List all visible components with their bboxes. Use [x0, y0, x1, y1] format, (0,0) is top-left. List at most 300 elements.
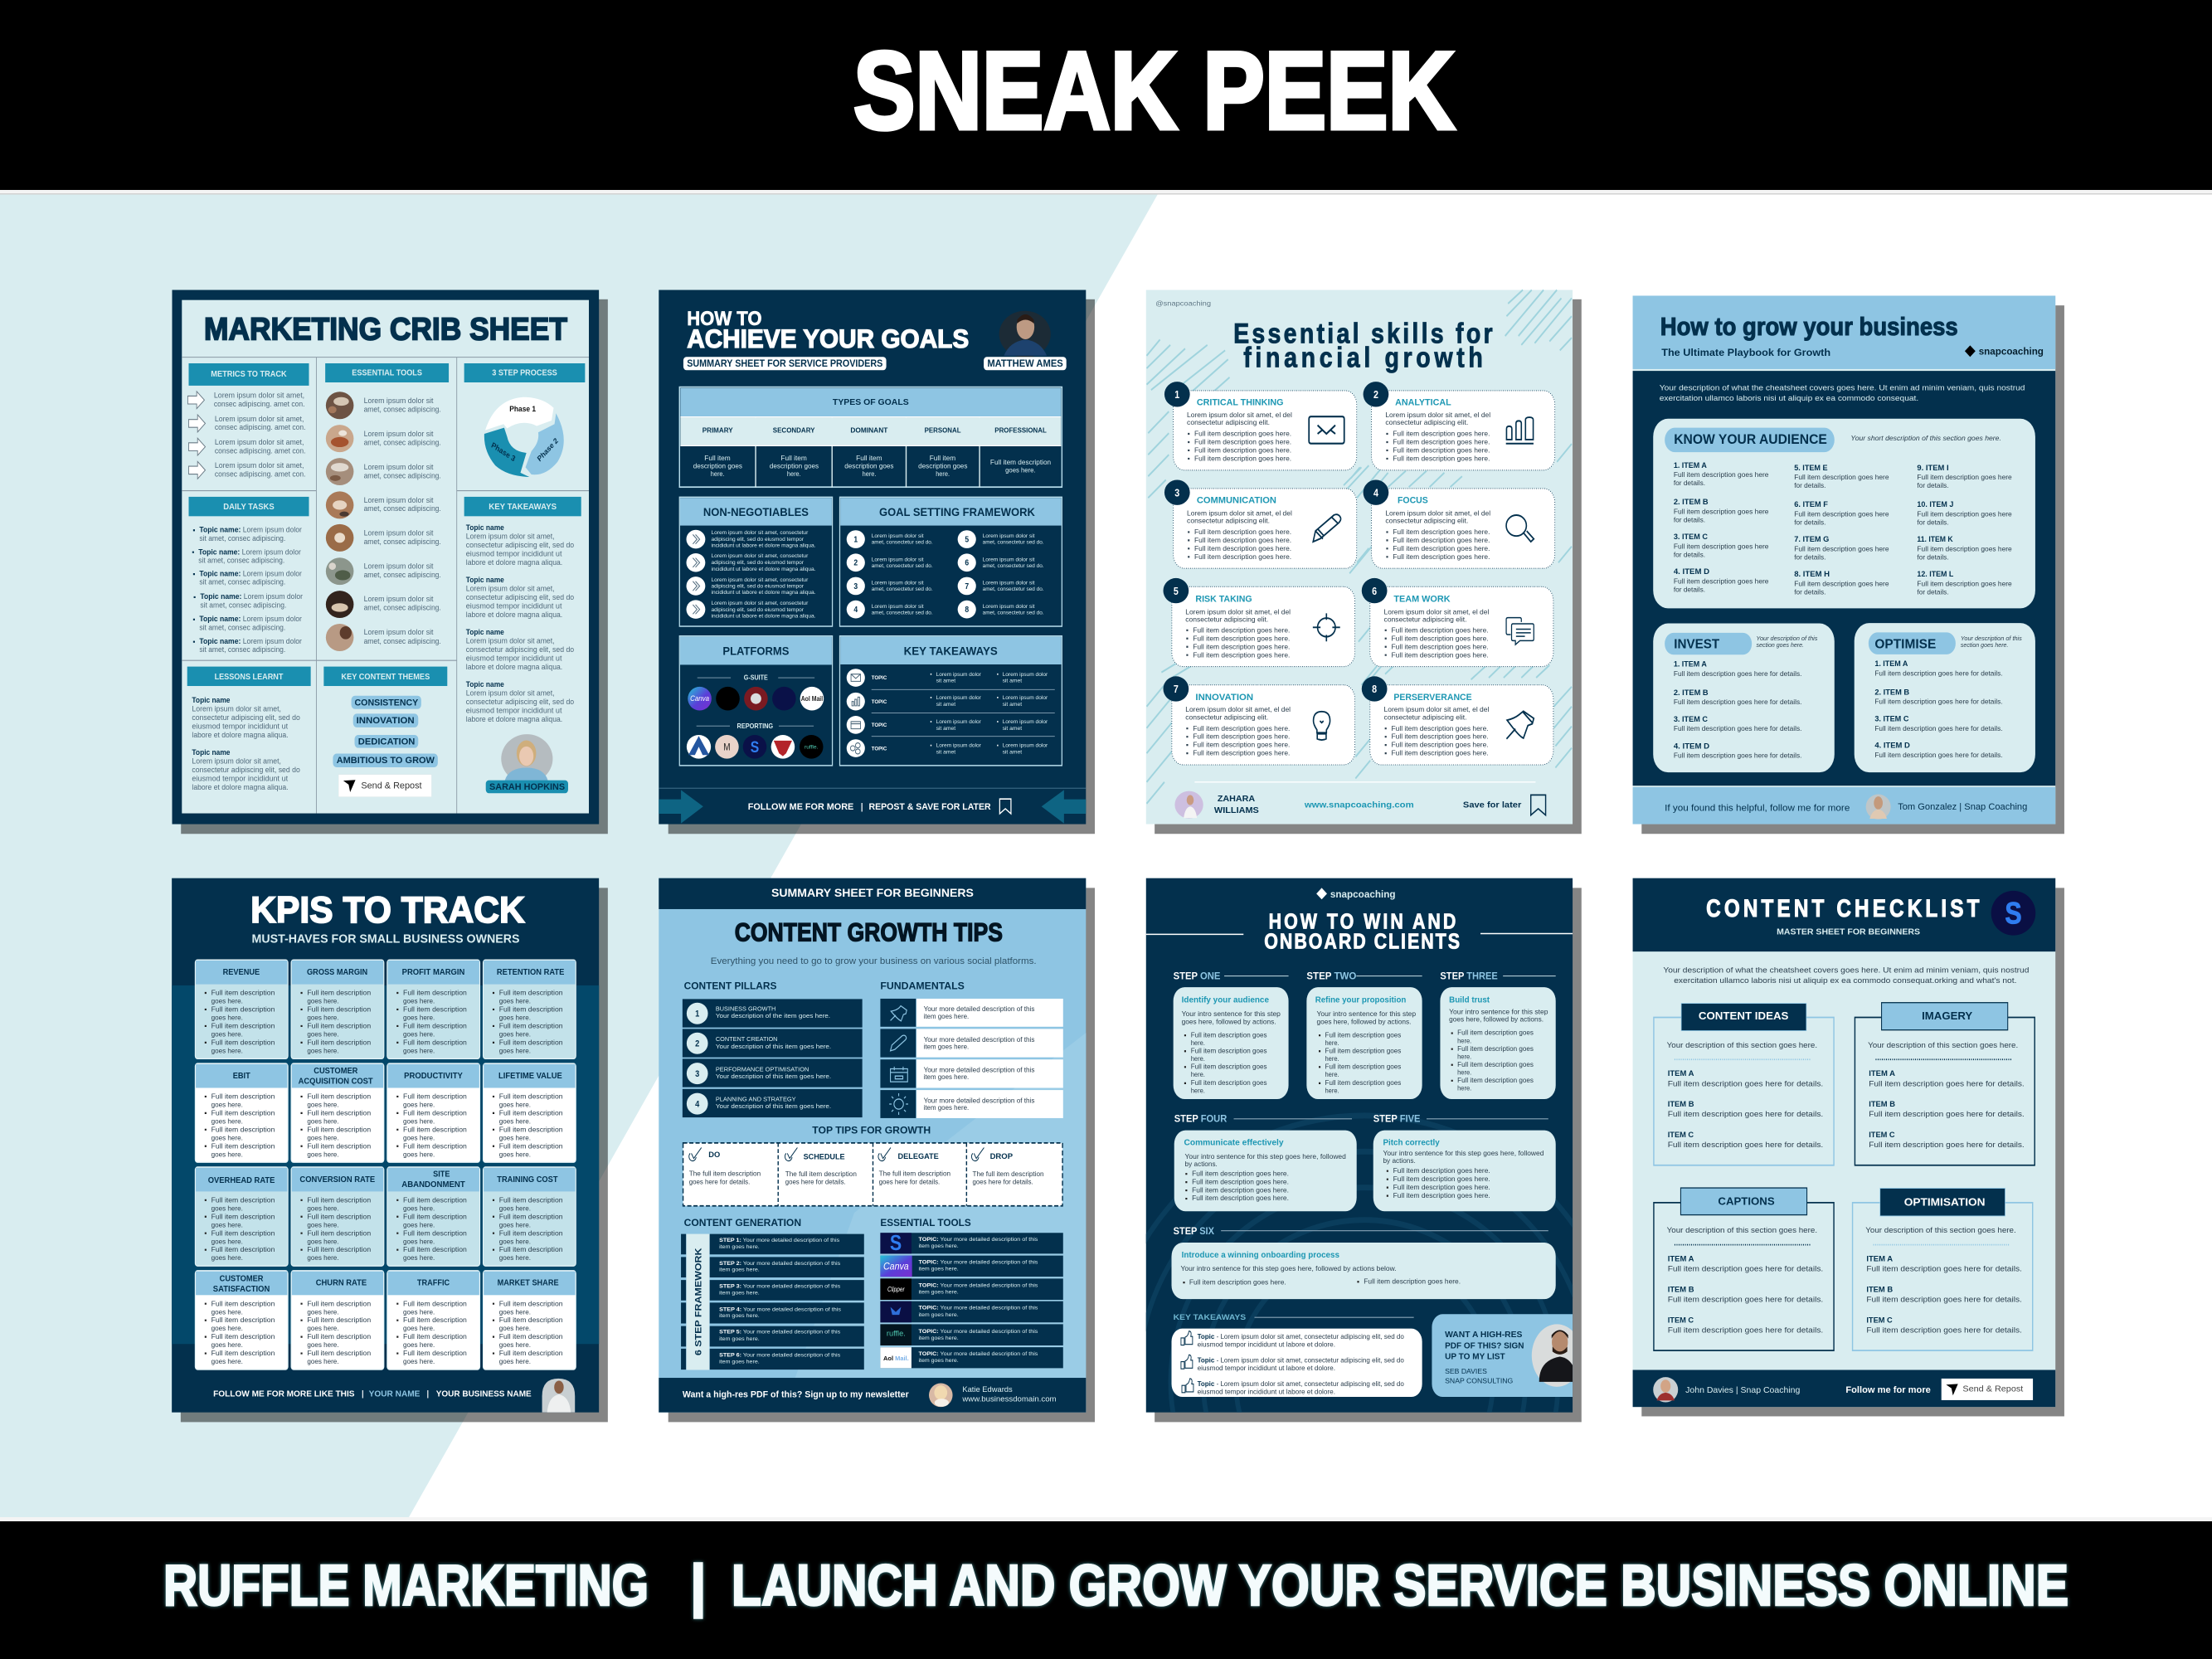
section: content generation: [681, 1218, 864, 1370]
card: gross margin: goes here.: [307, 1014, 339, 1022]
table: types of goals: PERSONAL: [925, 426, 961, 435]
card: step six: [1171, 1226, 1556, 1299]
card: conversion rate: goes here.: [307, 1254, 339, 1262]
footer strip with arrows: |: [861, 802, 863, 812]
section: non-negotiables: Lorem ipsum dolor sit amet, consectetur: [712, 577, 808, 583]
section: daily tasks: sit amet, consec adipiscing.: [199, 623, 285, 632]
footer strip: [213, 1379, 575, 1413]
footer strip: [1174, 782, 1546, 819]
section: key content themes: [323, 667, 447, 797]
card: traffic: Full item description: [403, 1350, 467, 1357]
section: daily tasks: Topic name: Lorem ipsum dolor: [199, 569, 302, 577]
card 5: risk taking: Full item description goes here.: [1193, 651, 1290, 659]
card 8: perseverance: 8: [1372, 683, 1377, 696]
card: revenue: goes here.: [211, 1014, 243, 1022]
table: types of goals: here.: [936, 470, 950, 478]
title: Everything you need to go to grow your business on various social platforms.: [711, 956, 1037, 966]
section: top tips for growth: [683, 1126, 1062, 1206]
card 8: perseverance: Full item description goes here.: [1392, 732, 1489, 741]
card: know your audience: KNOW YOUR AUDIENCE: [1674, 432, 1827, 448]
section: key takeaways: TOPIC: [872, 723, 887, 728]
section: lessons learnt: Lorem ipsum dolor sit amet,: [192, 757, 281, 766]
card: ebit: Full item description: [211, 1142, 275, 1151]
section: key takeaways: Lorem ipsum dolor: [936, 696, 981, 701]
icon: light bulb: [1314, 712, 1330, 740]
table: types of goals: here.: [711, 470, 725, 478]
card: step three: Your intro sentence for this step: [1449, 1008, 1548, 1016]
section: metrics to track: METRICS TO TRACK: [211, 369, 287, 378]
panel: essential skills for financial growth: [1146, 290, 1582, 834]
table: types of goals: description goes: [918, 462, 967, 470]
section: metrics to track: consec adipiscing. amet con.: [215, 423, 306, 431]
card: optimise: OPTIMISE: [1874, 637, 1936, 652]
card: retention rate: goes here.: [499, 1014, 531, 1022]
card: know your audience: Full item description goes here: [1794, 510, 1889, 518]
card: revenue: Full item description: [211, 1022, 275, 1030]
card: step five: Pitch correctly: [1383, 1138, 1440, 1148]
section: key takeaways: sit amet: [936, 679, 956, 684]
card 6: team work: 6: [1372, 585, 1377, 597]
card: productivity: goes here.: [403, 1134, 435, 1142]
section: essential tools: TOPIC: Your more detailed description of this: [919, 1260, 1038, 1266]
card: step two: Your intro sentence for this step: [1317, 1010, 1417, 1018]
section: key takeaways: eiusmod tempor incididunt ut: [466, 549, 562, 558]
section: non-negotiables: Lorem ipsum dolor sit amet, consectetur: [712, 601, 808, 606]
title: The Ultimate Playbook for Growth: [1661, 348, 1830, 358]
section: key takeaways: eiusmod tempor incididunt ut labore et dolore.: [1198, 1388, 1335, 1396]
section: content pillars: 4: [695, 1100, 700, 1110]
card: captions: [1654, 1188, 1834, 1350]
card: content ideas: CONTENT IDEAS: [1699, 1010, 1788, 1022]
section: content pillars: PLANNING AND STRATEGY: [716, 1097, 796, 1103]
section: top tips for growth: The full item description: [973, 1171, 1044, 1178]
card: step six: Your intro sentence for this step goes here, followed by actions below.: [1181, 1264, 1397, 1272]
background diagonal: [0, 194, 1158, 1517]
table: types of goals: here.: [863, 470, 876, 478]
callout: high-res pdf: PDF OF THIS? SIGN: [1445, 1341, 1524, 1351]
section: key takeaways: sit amet: [936, 750, 956, 756]
card 8: perseverance: Lorem ipsum dolor sit amet, el del: [1384, 706, 1490, 713]
table: types of goals: goes here.: [1005, 466, 1036, 474]
footer strip: |: [427, 1389, 429, 1399]
card 2: analytical: Full item description goes here.: [1393, 430, 1490, 438]
card 8: perseverance: [1362, 676, 1553, 765]
card 3: communication: Lorem ipsum dolor sit amet, el del: [1187, 509, 1292, 518]
card: step six: Introduce a winning onboarding process: [1182, 1250, 1339, 1260]
section: key content themes: CONSISTENCY: [355, 698, 418, 708]
card 3: communication: Full item description goes here.: [1194, 536, 1291, 544]
title: HOW TO WIN AND: [1269, 909, 1456, 934]
card: know your audience: Your short description of this section goes here.: [1850, 435, 2001, 442]
card: know your audience: Full item description goes here: [1674, 577, 1769, 586]
card: optimise: 2. ITEM B: [1874, 688, 1909, 697]
card: lifetime value: goes here.: [499, 1117, 531, 1126]
card: traffic: Full item description: [403, 1333, 467, 1340]
card: revenue: Full item description: [211, 1039, 275, 1047]
section: goal setting framework: 1: [853, 535, 858, 545]
card: conversion rate: goes here.: [307, 1221, 339, 1229]
card: training cost: goes here.: [499, 1204, 531, 1213]
section: key takeaways: Lorem ipsum dolor sit amet,: [466, 584, 555, 593]
title: How to grow your business: [1660, 313, 1958, 341]
section: goal setting framework: 3: [853, 581, 858, 591]
card: step four: STEP FOUR: [1174, 1114, 1228, 1125]
card 5: risk taking: consectetur adipiscing elit.: [1185, 615, 1268, 624]
card: invest: 1. ITEM A: [1674, 659, 1707, 669]
section: daily tasks: sit amet, consec adipiscing.: [200, 601, 286, 610]
card: know your audience: Full item description goes here: [1674, 542, 1769, 551]
top band: S: [2005, 897, 2022, 931]
icon: magnifier: [1506, 515, 1534, 542]
card: know your audience: 2. ITEM B: [1674, 497, 1709, 506]
card: optimise: [1855, 623, 2035, 772]
card 7: innovation: Full item description goes here.: [1193, 724, 1290, 732]
card: revenue: REVENUE: [223, 967, 260, 976]
card: customer acquisition cost: goes here.: [307, 1134, 339, 1142]
card: lifetime value: Full item description: [499, 1142, 563, 1151]
section: essential tools: Lorem ipsum dolor sit: [364, 627, 434, 636]
section: goal setting framework: Lorem ipsum dolor sit: [872, 605, 924, 610]
section: goal setting framework: Lorem ipsum dolor sit: [872, 557, 924, 563]
section: content generation: CONTENT GENERATION: [684, 1218, 801, 1228]
card: churn rate: goes here.: [307, 1357, 339, 1365]
card: step one: here.: [1191, 1070, 1205, 1078]
section: key takeaways: eiusmod tempor incididunt ut: [466, 706, 562, 715]
footer tagline: RUFFLE MARKETING: [163, 1553, 649, 1618]
card: step three: Full item description goes: [1457, 1044, 1534, 1053]
panel: how to win and onboard clients: [1146, 878, 1582, 1422]
card 3: communication: Full item description goes here.: [1194, 528, 1291, 536]
card: revenue: goes here.: [211, 1030, 243, 1039]
section: essential tools: TOPIC: Your more detailed description of this: [919, 1306, 1038, 1311]
card: overhead rate: goes here.: [211, 1221, 243, 1229]
section: goal setting framework: Lorem ipsum dolor sit: [872, 534, 924, 539]
top band: [659, 878, 1086, 909]
card: market share: Full item description: [499, 1350, 563, 1357]
section: top tips for growth: The full item description: [785, 1171, 857, 1178]
card: revenue: [195, 960, 288, 1058]
icon: pencil: [1313, 514, 1341, 542]
section: essential tools: item goes here.: [919, 1313, 959, 1318]
card: know your audience: Full item description goes here: [1917, 580, 2012, 588]
table: types of goals: TYPES OF GOALS: [833, 397, 909, 407]
section: essential tools: ESSENTIAL TOOLS: [880, 1218, 971, 1228]
section: key takeaways: labore et dolore magna aliqua.: [466, 662, 562, 671]
card 5: risk taking: 5: [1174, 585, 1179, 597]
card: site abandonment: goes here.: [403, 1238, 435, 1245]
card: know your audience: 7. ITEM G: [1794, 534, 1829, 543]
section: daily tasks: [189, 497, 309, 654]
section: lessons learnt: [187, 667, 311, 791]
section: metrics to track: Lorem ipsum dolor sit amet,: [215, 437, 304, 446]
table: types of goals: DOMINANT: [850, 426, 888, 435]
card: step one: STEP ONE: [1174, 971, 1220, 982]
card: market share: [484, 1271, 576, 1370]
card 8: perseverance: Full item description goes here.: [1392, 749, 1489, 757]
title: [1233, 317, 1493, 373]
table: types of goals: [679, 387, 1062, 488]
footer strip: YOUR NAME: [369, 1389, 420, 1399]
card: optimise: section goes here.: [1961, 643, 2008, 649]
section: content pillars: Your description of the item goes here.: [716, 1013, 830, 1019]
section: key takeaways: Topic - Lorem ipsum dolor sit amet, consectetur adipiscing elit, sed do: [1198, 1356, 1404, 1365]
card: know your audience: Full item description goes here: [1794, 580, 1889, 588]
card: optimisation: Full item description goes here for details.: [1866, 1295, 2022, 1304]
card: step two: Full item description goes: [1325, 1063, 1401, 1071]
title: CONTENT GROWTH TIPS: [735, 918, 1003, 947]
card: training cost: Full item description: [499, 1246, 563, 1253]
card: captions: Full item description goes here for details.: [1668, 1326, 1823, 1335]
section: goal setting framework: amet, consectetur sed do.: [983, 587, 1044, 592]
table: types of goals: description goes: [844, 462, 894, 470]
card 7: innovation: Full item description goes here.: [1193, 749, 1290, 757]
card: churn rate: Full item description: [307, 1316, 371, 1324]
section: goal setting framework: amet, consectetur sed do.: [872, 611, 933, 615]
footer strip with arrows: REPOST & SAVE FOR LATER: [869, 802, 991, 812]
card: step four: Full item description goes here.: [1192, 1178, 1289, 1185]
section: lessons learnt: eiusmod tempor incididunt ut: [192, 774, 289, 783]
card: customer satisfaction: goes here.: [211, 1325, 243, 1332]
section: platforms: Canva: [690, 693, 709, 703]
section: key takeaways: Topic - Lorem ipsum dolor sit amet, consectetur adipiscing elit, sed do: [1198, 1379, 1404, 1388]
card: step one: Full item description goes: [1191, 1078, 1267, 1087]
button: send and repost: Send & Repost: [361, 781, 422, 791]
section: essential tools: Aol Mail.: [883, 1356, 909, 1362]
title: Essential skills for: [1233, 317, 1493, 349]
button: send and repost: Send & Repost: [1962, 1384, 2024, 1394]
section: essential tools: item goes here.: [919, 1336, 959, 1341]
card 6: team work: Full item description goes here.: [1392, 626, 1489, 635]
icon: envelope: [1309, 416, 1344, 444]
card: ebit: goes here.: [211, 1117, 243, 1126]
section: essential tools: amet, consec adipiscing.: [364, 603, 441, 612]
icon: push pin: [1506, 711, 1534, 739]
card: invest: Full item description goes here for details.: [1674, 725, 1802, 732]
table: types of goals: Full item description: [990, 458, 1051, 466]
card: know your audience: 5. ITEM E: [1794, 463, 1828, 472]
card: know your audience: for details.: [1794, 518, 1826, 526]
card: captions: Full item description goes here for details.: [1668, 1264, 1823, 1273]
card: customer acquisition cost: Full item description: [307, 1109, 371, 1117]
section: key takeaways: labore et dolore magna aliqua.: [466, 714, 562, 723]
card: lifetime value: goes here.: [499, 1101, 531, 1109]
card: invest: INVEST: [1674, 637, 1719, 652]
section: top tips for growth: TOP TIPS FOR GROWTH: [812, 1126, 931, 1136]
card: conversion rate: [291, 1167, 384, 1266]
card: conversion rate: CONVERSION RATE: [299, 1175, 375, 1184]
card: step two: here.: [1325, 1070, 1339, 1078]
section: essential tools: amet, consec adipiscing.: [364, 636, 441, 645]
section: fundamentals: Your more detailed description of this: [924, 1097, 1035, 1104]
card 5: risk taking: Full item description goes here.: [1193, 643, 1290, 651]
section: daily tasks: Topic name: Lorem ipsum dolor: [198, 547, 301, 556]
card: churn rate: CHURN RATE: [316, 1278, 367, 1287]
card: know your audience: Full item description goes here: [1674, 470, 1769, 479]
section: key takeaways: Lorem ipsum dolor: [936, 720, 981, 725]
section: content generation: STEP 2: Your more detailed description of this: [719, 1262, 840, 1267]
section: metrics to track: consec adipiscing. amet con.: [215, 446, 306, 455]
section: content generation: item goes here.: [719, 1337, 760, 1342]
card: know your audience: Full item description goes here: [1794, 473, 1889, 481]
section: goal setting framework: Lorem ipsum dolor sit: [983, 534, 1035, 539]
logo: snapcoaching: snapcoaching: [1979, 347, 2044, 358]
card: gross margin: goes here.: [307, 1047, 339, 1055]
card: lifetime value: Full item description: [499, 1092, 563, 1101]
card: step one: Full item description goes: [1191, 1047, 1267, 1055]
card 7: innovation: INNOVATION: [1195, 693, 1253, 703]
card: optimise: Full item description goes here for details.: [1874, 698, 2003, 706]
card: content ideas: Full item description goes here for details.: [1668, 1079, 1823, 1088]
card: ebit: Full item description: [211, 1126, 275, 1134]
card 4: focus: Full item description goes here.: [1393, 544, 1490, 552]
table: types of goals: PROFESSIONAL: [994, 426, 1047, 435]
card: step five: Full item description goes here.: [1393, 1183, 1490, 1191]
card 1: critical thinking: Full item description goes here.: [1194, 438, 1291, 446]
card: revenue: Full item description: [211, 1005, 275, 1014]
section: content pillars: Your description of this item goes here.: [716, 1074, 831, 1080]
card 3: communication: Full item description goes here.: [1194, 552, 1291, 561]
card 4: focus: [1364, 480, 1555, 568]
footer strip: www.snapcoaching.com: [1304, 800, 1414, 810]
card 5: risk taking: [1163, 578, 1355, 667]
card: step three: [1440, 971, 1556, 1099]
card 1: critical thinking: CRITICAL THINKING: [1197, 398, 1284, 408]
footer strip: |: [362, 1389, 363, 1399]
section: essential tools: item goes here.: [919, 1290, 959, 1296]
card 3: communication: consectetur adipiscing elit.: [1187, 517, 1270, 525]
section: lessons learnt: LESSONS LEARNT: [215, 672, 284, 681]
card: gross margin: Full item description: [307, 1039, 371, 1047]
card: site abandonment: Full item description: [403, 1246, 467, 1253]
section: essential tools: Lorem ipsum dolor sit: [364, 396, 434, 405]
title: [1146, 909, 1573, 954]
card 2: analytical: [1364, 382, 1555, 470]
section: essential tools: Canva: [883, 1262, 909, 1272]
title: ONBOARD CLIENTS: [1264, 930, 1460, 954]
card: site abandonment: [387, 1167, 480, 1266]
chart: phase cycle: Phase 2: [536, 436, 560, 463]
card: overhead rate: goes here.: [211, 1238, 243, 1245]
card: content ideas: Full item description goes here for details.: [1668, 1140, 1823, 1149]
title: [250, 889, 525, 946]
card: ebit: goes here.: [211, 1101, 243, 1109]
card: productivity: [387, 1063, 480, 1162]
section: platforms: G-SUITE: [744, 674, 768, 682]
card: know your audience: Full item description goes here: [1917, 473, 2012, 481]
panel: content growth tips: [659, 878, 1095, 1422]
card: overhead rate: goes here.: [211, 1254, 243, 1262]
title: financial growth: [1243, 341, 1483, 373]
section: essential tools: item goes here.: [919, 1267, 959, 1272]
card: traffic: goes here.: [403, 1325, 435, 1332]
card: know your audience: 11. ITEM K: [1917, 534, 1953, 543]
title: [683, 307, 969, 370]
section: non-negotiables: adipiscing elit, sed do eiusmod tempor: [712, 584, 804, 590]
card: ebit: Full item description: [211, 1092, 275, 1101]
card 6: team work: [1362, 578, 1553, 667]
card: profit margin: Full item description: [403, 1039, 467, 1047]
footer strip: John Davies | Snap Coaching: [1685, 1385, 1800, 1394]
section: key takeaways: eiusmod tempor incididunt ut: [466, 654, 562, 663]
section: key takeaways: TOPIC: [872, 747, 887, 752]
card: profit margin: goes here.: [403, 1047, 435, 1055]
card: customer acquisition cost: [291, 1063, 384, 1162]
card: productivity: Full item description: [403, 1109, 467, 1117]
card 8: perseverance: PERSERVERANCE: [1393, 693, 1472, 703]
card: market share: Full item description: [499, 1316, 563, 1324]
card: know your audience: for details.: [1794, 481, 1826, 489]
card: imagery: ITEM B: [1869, 1099, 1895, 1108]
panel: how to grow your business: [1633, 295, 2064, 834]
card: step two: STEP TWO: [1306, 971, 1356, 982]
card: captions: ITEM B: [1668, 1285, 1694, 1294]
card: overhead rate: OVERHEAD RATE: [208, 1175, 275, 1185]
section: content pillars: PERFORMANCE OPTIMISATION: [716, 1067, 809, 1073]
table: types of goals: description goes: [693, 462, 742, 470]
card: step one: Your intro sentence for this step: [1182, 1010, 1281, 1018]
section: 3 step process: 3 STEP PROCESS: [492, 368, 557, 377]
card: know your audience: for details.: [1794, 588, 1826, 596]
section: essential tools: Lorem ipsum dolor sit: [364, 528, 434, 538]
card: know your audience: 3. ITEM C: [1674, 532, 1708, 541]
chart: phase cycle: [484, 397, 564, 477]
section: metrics to track: consec adipiscing. amet con.: [214, 399, 305, 408]
section: essential tools: amet, consec adipiscing.: [364, 504, 441, 513]
card: optimise: Full item description goes here for details.: [1874, 751, 2003, 759]
section: key takeaways: Topic name: [466, 627, 504, 636]
card: traffic: TRAFFIC: [417, 1278, 450, 1287]
card: profit margin: [387, 960, 480, 1058]
card: overhead rate: Full item description: [211, 1229, 275, 1237]
card: optimisation: [1853, 1188, 2033, 1350]
section: top tips for growth: The full item description: [879, 1170, 950, 1178]
card: retention rate: Full item description: [499, 1022, 563, 1030]
section: essential tools: TOPIC: Your more detailed description of this: [919, 1329, 1038, 1335]
section: key takeaways: sit amet: [936, 727, 956, 732]
card: step one: here.: [1191, 1039, 1205, 1047]
card: step two: here.: [1325, 1054, 1339, 1063]
intro text: [1663, 966, 2030, 985]
section: platforms: M: [723, 742, 731, 753]
section: essential tools: Lorem ipsum dolor sit: [364, 429, 434, 438]
section: content pillars: [683, 981, 863, 1117]
card: market share: goes here.: [499, 1357, 531, 1365]
card: step five: [1373, 1114, 1556, 1211]
card: profit margin: Full item description: [403, 1005, 467, 1014]
card: profit margin: goes here.: [403, 1014, 435, 1022]
card: retention rate: Full item description: [499, 1039, 563, 1047]
card: productivity: Full item description: [403, 1126, 467, 1134]
section: goal setting framework: 2: [853, 558, 858, 568]
section: goal setting framework: amet, consectetur sed do.: [983, 564, 1044, 569]
section: platforms: REPORTING: [737, 723, 774, 730]
card: optimise: Your description of this: [1961, 635, 2023, 642]
table: types of goals: description goes: [770, 462, 819, 470]
card: optimisation: ITEM B: [1866, 1285, 1893, 1294]
footer band: [0, 1517, 2212, 1659]
section: key takeaways: Lorem ipsum dolor: [1003, 743, 1048, 749]
avatar: matthew ames: MATTHEW AMES: [987, 358, 1063, 369]
card: overhead rate: Full item description: [211, 1196, 275, 1204]
card: invest: 2. ITEM B: [1674, 688, 1709, 697]
card 5: risk taking: Full item description goes here.: [1193, 635, 1290, 643]
card: step one: here.: [1191, 1087, 1205, 1095]
card: ebit: goes here.: [211, 1134, 243, 1142]
card: profit margin: PROFIT MARGIN: [402, 967, 464, 976]
card: training cost: goes here.: [499, 1221, 531, 1229]
section: top tips for growth: goes here for details.: [879, 1179, 940, 1185]
card: training cost: goes here.: [499, 1238, 531, 1245]
